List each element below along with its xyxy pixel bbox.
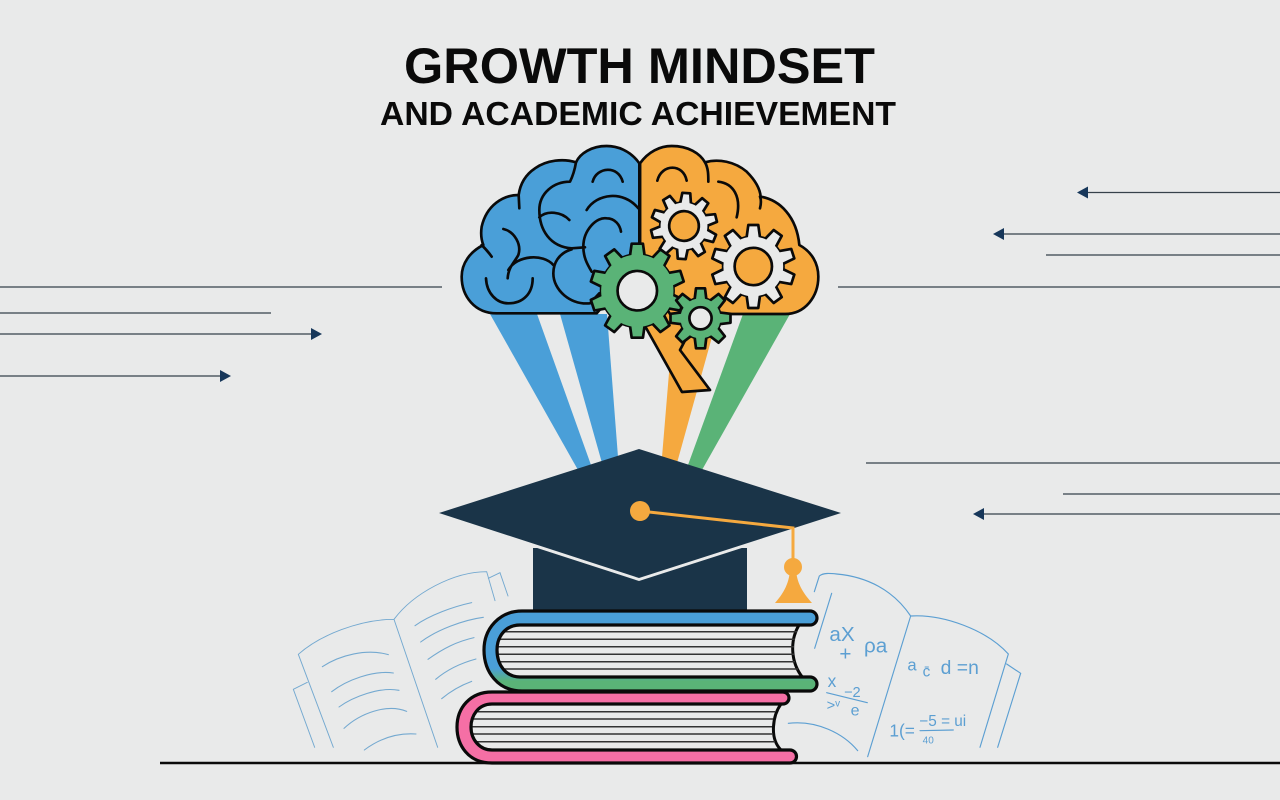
formula text: a	[907, 656, 917, 675]
formula text: −5 = ui	[919, 713, 966, 730]
gear: white top	[649, 191, 719, 261]
formula text: ρa	[864, 635, 888, 658]
beam: green	[688, 314, 790, 470]
formula text	[827, 623, 979, 746]
brain fold lines	[482, 162, 761, 303]
brain: orange right hemisphere	[640, 146, 818, 314]
book: top blue and green	[484, 611, 817, 691]
cap board	[439, 449, 841, 578]
graduation cap	[439, 449, 841, 611]
magnifier handle shape	[645, 310, 710, 392]
formula text: e	[851, 702, 860, 719]
beam: blue left	[490, 314, 591, 470]
formula text: x	[828, 671, 837, 691]
book: bottom pink	[457, 692, 797, 763]
arrow: right pointing, lower	[0, 370, 231, 382]
heading: main title: GROWTH MINDSET	[404, 38, 875, 94]
heading: subtitle: AND ACADEMIC ACHIEVEMENT	[380, 95, 896, 132]
left open notebook sketch	[293, 572, 508, 750]
formula text: 40	[923, 735, 934, 746]
arrow: left pointing, bottom	[973, 508, 1280, 520]
brain: blue left hemisphere	[462, 146, 639, 313]
beam: blue right	[560, 314, 618, 463]
formula text: aX	[829, 623, 855, 646]
gear: green large	[590, 244, 684, 338]
formula text: c̄	[923, 664, 931, 681]
right open notebook sketch with formulas	[788, 573, 1021, 757]
arrow: right pointing, upper	[0, 328, 322, 340]
arrow: left pointing, second	[993, 228, 1280, 240]
cap edge highlight	[531, 540, 748, 581]
arrow: left pointing, top	[1077, 186, 1280, 198]
book stack	[457, 611, 817, 763]
tassel	[630, 501, 812, 603]
cap base	[533, 548, 747, 611]
beam: orange	[662, 337, 712, 463]
left side lines and arrows	[0, 287, 442, 382]
brain	[462, 146, 818, 314]
formula text: +	[839, 643, 851, 666]
formula text: 1(=	[889, 721, 915, 741]
ground line	[160, 762, 1280, 764]
light beams from brain to cap	[490, 314, 790, 470]
title	[380, 38, 896, 132]
gear: white large	[712, 225, 795, 308]
formula text: d =n	[941, 658, 979, 679]
gear: green small	[670, 288, 730, 348]
formula text: >ᵛ	[827, 698, 840, 714]
right side lines and arrows	[838, 186, 1280, 520]
formula text: −2	[844, 685, 861, 701]
